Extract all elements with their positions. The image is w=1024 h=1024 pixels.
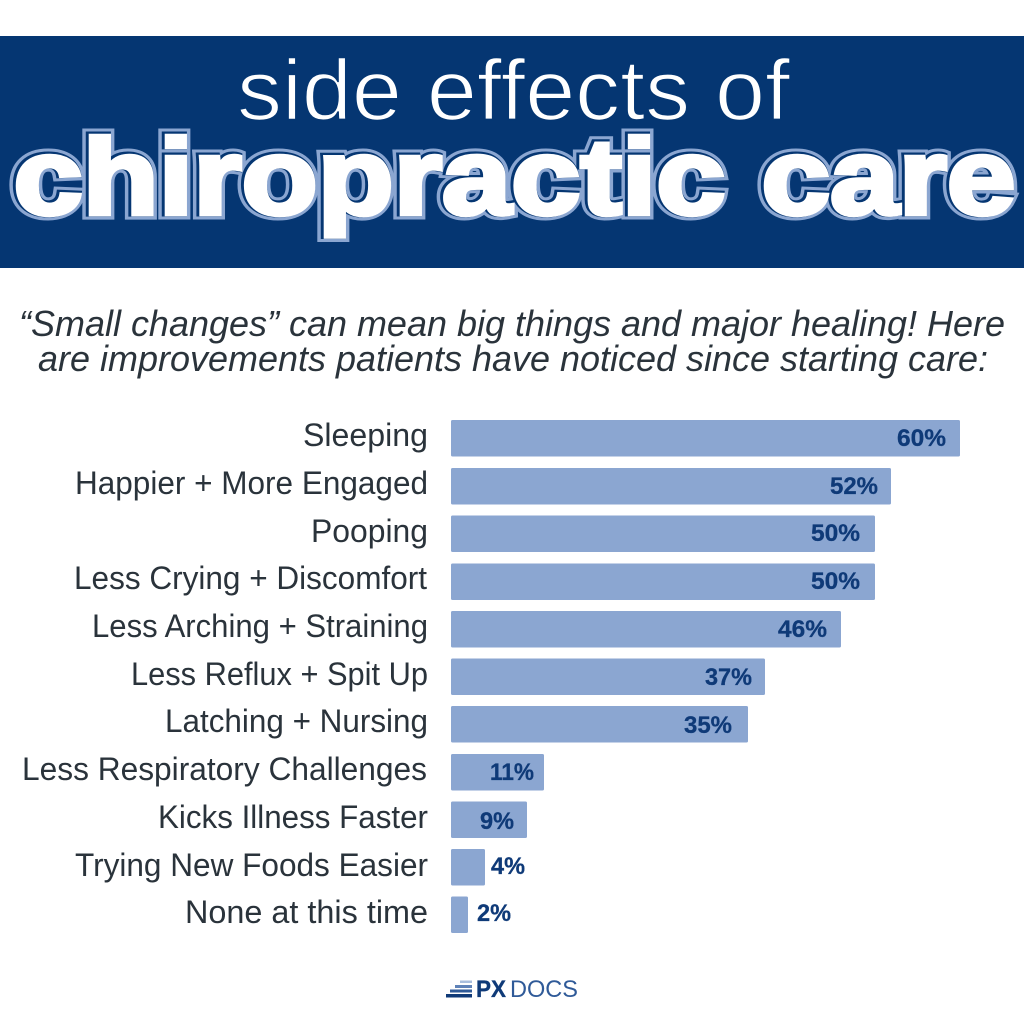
row: Less Arching + Straining 46%: 46% xyxy=(778,616,827,643)
row: Sleeping 60%: Sleeping xyxy=(303,417,428,453)
row: Less Arching + Straining 46% xyxy=(92,608,841,648)
row: Happier + More Engaged 52%: Happier + More Engaged xyxy=(75,465,428,501)
title line 2: care xyxy=(760,115,1014,236)
row: Less Respiratory Challenges 11%: 11% xyxy=(490,759,534,786)
row: Kicks Illness Faster 9%: 9% xyxy=(480,808,514,835)
header banner xyxy=(0,36,1024,268)
title line 2: care xyxy=(762,116,1016,237)
row: Sleeping 60%: 60% xyxy=(897,425,946,452)
row: Happier + More Engaged 52% xyxy=(75,465,891,504)
logo: PX Docs: DOCS xyxy=(510,976,578,1003)
row: Less Reflux + Spit Up 37%: Less Reflux + Spit Up xyxy=(131,656,428,692)
row: Less Reflux + Spit Up 37% xyxy=(131,656,765,695)
title line 2: chiropractic xyxy=(12,115,724,236)
row: Less Reflux + Spit Up 37%: 37% xyxy=(705,664,752,691)
row: Sleeping 60% xyxy=(303,417,960,456)
title line 2: care xyxy=(760,115,1014,236)
icon: stair steps xyxy=(446,980,472,998)
row: Pooping 50%: Pooping xyxy=(311,513,428,549)
row: None at this time 2%: None at this time xyxy=(185,894,428,930)
row: Happier + More Engaged 52%: 52% xyxy=(830,473,878,500)
subtitle xyxy=(19,303,1005,379)
row: Pooping 50%: 50% xyxy=(811,520,860,547)
row: Less Crying + Discomfort 50%: Less Crying + Discomfort xyxy=(74,560,427,596)
row: Less Crying + Discomfort 50% xyxy=(74,560,875,600)
subtitle: are improvements patients have noticed since starting care: xyxy=(38,338,988,379)
title line 2 xyxy=(12,115,1016,237)
title line 2: chiropractic xyxy=(12,115,724,236)
row: Kicks Illness Faster 9%: Kicks Illness Faster xyxy=(158,799,428,835)
row: Trying New Foods Easier 4%: 4% xyxy=(491,853,525,880)
subtitle: “Small changes” can mean big things and major healing! Here xyxy=(19,303,1005,344)
row: None at this time 2% xyxy=(185,894,511,933)
logo: PX Docs xyxy=(446,976,578,1003)
row: Less Respiratory Challenges 11%: Less Respiratory Challenges xyxy=(22,751,427,787)
title line 1: side effects of xyxy=(237,44,790,138)
row: Kicks Illness Faster 9% xyxy=(158,799,527,838)
row: Latching + Nursing 35%: 35% xyxy=(684,712,732,739)
row: None at this time 2%: 2% xyxy=(477,900,511,927)
row: Pooping 50% xyxy=(311,513,875,552)
row: Less Arching + Straining 46%: Less Arching + Straining xyxy=(92,608,428,644)
bar chart xyxy=(22,417,960,933)
logo: PX Docs: PX xyxy=(476,976,506,1003)
row: Trying New Foods Easier 4%: Trying New Foods Easier xyxy=(75,847,428,883)
row: Latching + Nursing 35%: Latching + Nursing xyxy=(165,703,428,739)
row: Latching + Nursing 35% xyxy=(165,703,748,742)
title line 2: chiropractic xyxy=(14,116,725,237)
row: Less Crying + Discomfort 50%: 50% xyxy=(811,568,860,595)
